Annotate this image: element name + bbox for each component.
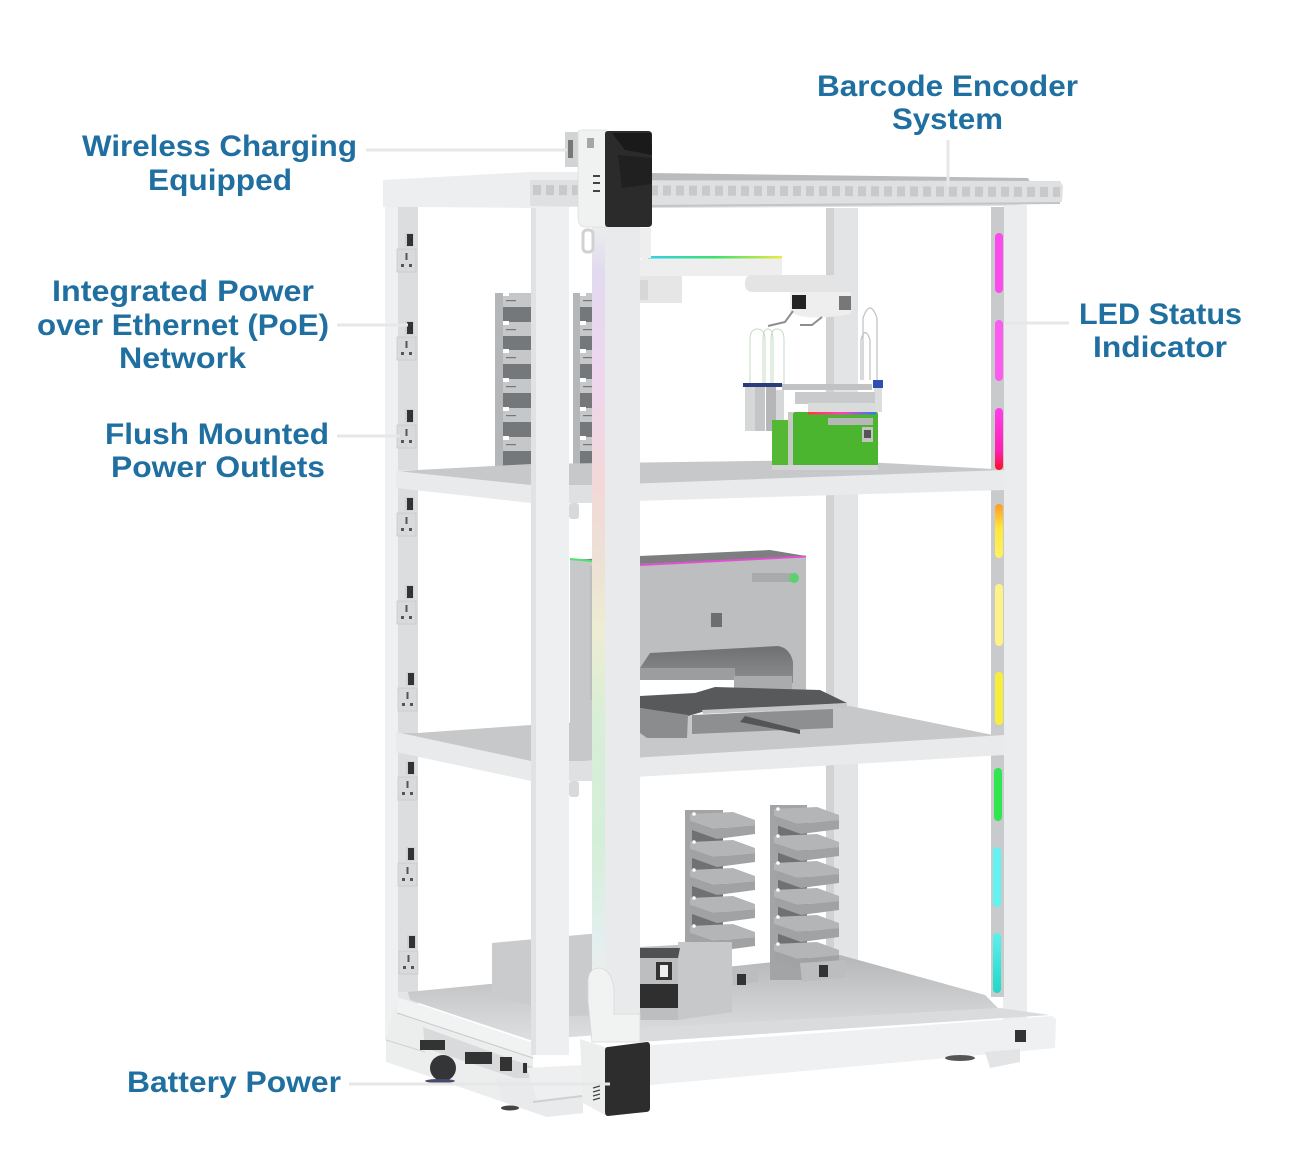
label: Wireless Charging Equipped: Equipped <box>148 164 292 197</box>
frame: front rail <box>640 1008 1056 1086</box>
label: Integrated Power over Ethernet (PoE) Network <box>37 275 329 375</box>
label: Integrated Power over Ethernet (PoE) Network: Network <box>119 342 246 375</box>
wireless charging module and black cover <box>565 130 652 227</box>
label: Barcode Encoder System: Barcode Encoder <box>817 70 1078 103</box>
middle shelf <box>396 706 1004 781</box>
frame: right post with LED channel <box>991 205 1027 1020</box>
leader line: PoE network <box>337 324 408 326</box>
label: Barcode Encoder System <box>817 70 1078 136</box>
frame: base with casters and connector panel <box>386 997 583 1117</box>
robot arm <box>640 256 851 326</box>
upper shelf <box>396 460 1004 503</box>
bottom shelf items: plate racks <box>685 805 845 985</box>
LED status indicator strip <box>993 233 1003 993</box>
label: Flush Mounted Power Outlets: Flush Mounted <box>105 418 329 451</box>
label: Wireless Charging Equipped: Wireless Charging <box>82 130 357 163</box>
label: LED Status Indicator <box>1079 298 1242 364</box>
bottom shelf floor <box>408 955 1000 1040</box>
liquid handler: pipette tips, reagents and green module <box>743 308 883 470</box>
frame: front left post <box>531 200 592 1055</box>
label: Integrated Power over Ethernet (PoE) Network: Integrated Power <box>52 275 314 308</box>
top shelf items: slotted plate racks <box>495 292 608 470</box>
label: LED Status Indicator: Indicator <box>1093 331 1227 364</box>
frame: rear middle post <box>826 208 858 968</box>
barcode encoder rail <box>530 180 1063 208</box>
label: LED Status Indicator: LED Status <box>1079 298 1242 331</box>
leader line: LED status <box>1005 322 1069 324</box>
icon: flush power outlets <box>397 233 418 974</box>
label: Battery Power: Battery Power <box>127 1066 341 1099</box>
main front post with colour light strip <box>583 226 651 1042</box>
label: Flush Mounted Power Outlets: Power Outlets <box>111 451 325 484</box>
battery power unit <box>580 1039 650 1116</box>
instrument: grey plate reader with tray <box>570 550 847 747</box>
leader line: battery power <box>349 1082 610 1086</box>
label: Integrated Power over Ethernet (PoE) Network: over Ethernet (PoE) <box>37 309 329 342</box>
label: Wireless Charging Equipped <box>82 130 357 197</box>
icon: caster wheel <box>425 1055 456 1083</box>
leader line: power outlets <box>337 434 400 438</box>
leader line: wireless charging <box>366 148 567 152</box>
leader line: barcode encoder <box>946 140 950 186</box>
frame: rear left post with outlets <box>385 200 418 1040</box>
bottom shelf items: boxed modules <box>492 933 732 1020</box>
frame: top beam <box>383 172 1030 208</box>
label: Flush Mounted Power Outlets <box>105 418 329 484</box>
label: Barcode Encoder System: System <box>892 103 1003 136</box>
